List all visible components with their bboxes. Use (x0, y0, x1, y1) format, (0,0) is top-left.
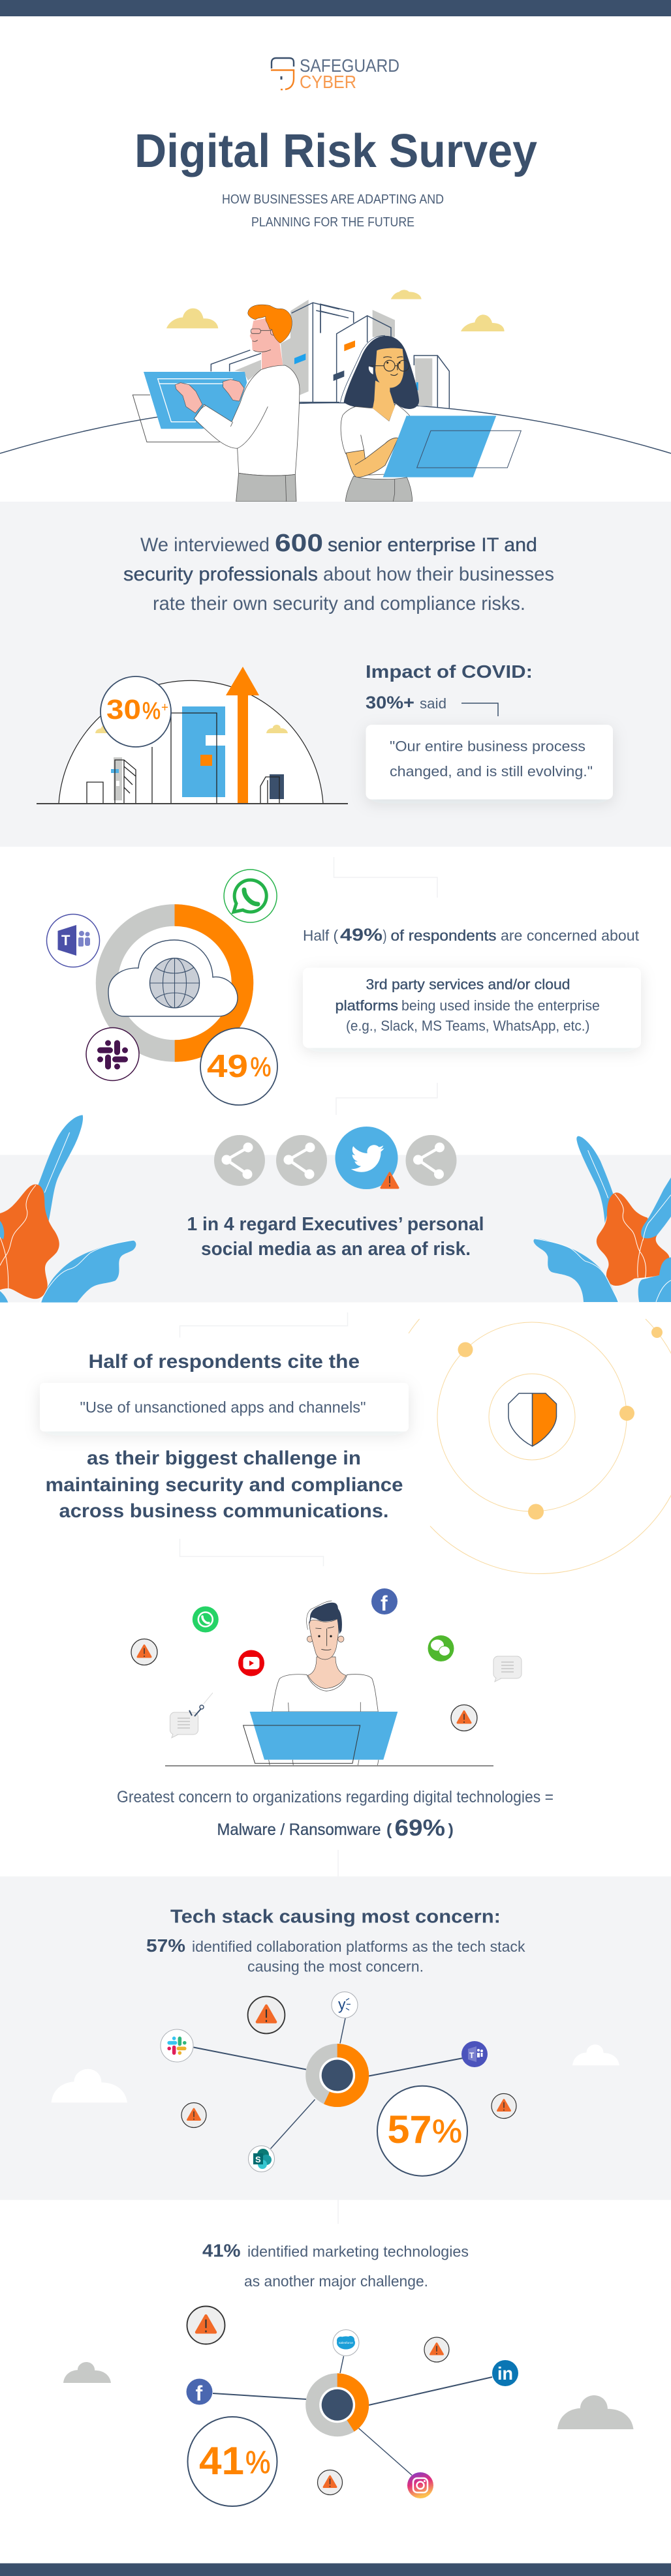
icon: SharePoint: S (255, 2155, 261, 2164)
text: 30%+ said: said (420, 695, 446, 712)
dome (59, 680, 323, 804)
buildings (87, 706, 284, 804)
icon: Instagram (407, 2472, 433, 2498)
text: biggest challenge: across business communications. (59, 1500, 389, 1522)
logo: SafeGuard Cyber: SAFEGUARD (300, 55, 399, 76)
text: 41% identified: as another major challenge. (244, 2273, 428, 2290)
intro text: 600 (275, 530, 323, 557)
icon: YouTube (238, 1650, 264, 1676)
illustration: worried man at laptop (165, 1601, 493, 1766)
heading: Impact of COVID: Impact of COVID: (366, 661, 533, 682)
icon: Yammer (332, 1992, 358, 2018)
text: 57% identified: identified collaboration platforms as the tech stack (192, 1938, 525, 1955)
icon: Yammer: y (338, 1996, 346, 2013)
icon: warning small left (181, 2103, 206, 2128)
logo: SafeGuard Cyber (271, 55, 399, 92)
icon: Facebook: f (381, 1592, 388, 1615)
scene: woman with tablet and buildings (320, 304, 521, 502)
text: malware 69%: ( (386, 1821, 392, 1839)
text: 57% identified: 57% (146, 1935, 185, 1956)
callout: unsanctioned card (40, 1383, 409, 1431)
text: biggest challenge: as their biggest challenge in (87, 1447, 361, 1469)
text: 57% identified (146, 1935, 525, 1975)
icon: Facebook (371, 1588, 398, 1615)
text: greatest concern: Greatest concern to organizations regarding digital technologies = (117, 1788, 554, 1806)
top bar (0, 0, 671, 16)
intro text: about how their businesses (323, 564, 554, 585)
stat bubble: 41% (188, 2417, 277, 2506)
ground line (37, 803, 348, 804)
panel: executives social media (0, 1115, 671, 1303)
text: 1 in 4 (187, 1214, 484, 1260)
text: half of respondents (303, 925, 639, 945)
icon: Microsoft Teams: T (61, 932, 70, 948)
icon: Facebook (187, 2378, 213, 2405)
icon: LinkedIn: in (497, 2363, 513, 2384)
clouds in dome (95, 725, 288, 733)
heading: tech stack: Tech stack causing most concern: (170, 1906, 501, 1927)
donut chart 57% (313, 2051, 362, 2100)
stat bubble: 49% (200, 1028, 277, 1105)
icon: Facebook: f (196, 2382, 202, 2405)
text: 57% identified: causing the most concern. (247, 1958, 424, 1975)
intro text: rate their own security and compliance risks. (153, 593, 525, 614)
icon: Slack colour (161, 2029, 193, 2062)
stat bubble: 57%: 57 (388, 2108, 432, 2151)
callout: third-party card (303, 968, 641, 1048)
text: half of respondents cite: Half of respondents cite the (89, 1351, 360, 1372)
stat bubble: 30%+: % (142, 697, 161, 724)
icon: chat bubble right (493, 1656, 522, 1682)
icon: Salesforce: salesforce (339, 2341, 354, 2344)
text: 41% identified (202, 2240, 469, 2290)
panel: tech stack 57% (0, 1876, 671, 2200)
text: malware 69%: ) (448, 1821, 454, 1839)
text: 30%+ said (366, 693, 446, 712)
intro text: security professionals (123, 564, 318, 585)
text: half of respondents: of respondents (390, 927, 496, 944)
icon: Teams filled (461, 2041, 488, 2067)
connectors (193, 2018, 463, 2149)
stat bubble: 41%: % (245, 2446, 270, 2480)
cloud: yellow left (166, 309, 218, 328)
panel background (0, 1155, 671, 1302)
bottom bar (0, 2564, 671, 2576)
icon: WhatsApp (224, 870, 277, 922)
text: 1 in 4: 1 in 4 regard Executives’ personal (187, 1214, 484, 1235)
clouds: white (51, 2044, 619, 2102)
panel background (0, 502, 671, 847)
stat bubble: 57%: % (432, 2113, 462, 2149)
text: 41% identified: identified marketing technologies (247, 2243, 469, 2260)
ground line (165, 1765, 493, 1766)
illustration: right plant (533, 1136, 671, 1303)
text: 41% identified: 41% (202, 2240, 241, 2261)
callout: quote card: changed, and is still evolving." (390, 763, 593, 780)
icon: Teams filled: T (469, 2051, 475, 2060)
intro text: senior enterprise IT and (328, 534, 537, 556)
text: malware 69%: Malware / Ransomware (217, 1821, 381, 1839)
icon: Twitter with warning (336, 1127, 398, 1189)
stat bubble: 49%: % (251, 1052, 272, 1082)
callout: quote card (366, 725, 613, 800)
donut chart 49% (107, 915, 243, 1051)
donut chart 41% (313, 2380, 362, 2430)
icon: warning right (451, 1705, 477, 1731)
stat bubble: 49%: 49 (207, 1049, 248, 1084)
icon: Microsoft Teams (47, 915, 99, 967)
illustration: left plant (0, 1115, 136, 1303)
icon: warning small top (424, 2337, 449, 2362)
connector (461, 703, 498, 716)
icon: LinkedIn (492, 2360, 518, 2386)
connectors (213, 2356, 492, 2475)
ground arc (0, 403, 671, 453)
icon: share circle 3 (406, 1135, 457, 1186)
icon: share circle 2 (276, 1135, 327, 1186)
clouds: yellow right (391, 290, 505, 331)
clouds: grey (63, 2362, 633, 2429)
text: 30%+ said: 30%+ (366, 693, 414, 712)
icon: warning large (187, 2307, 225, 2344)
intro text (123, 530, 554, 614)
text: malware 69%: 69% (394, 1815, 445, 1841)
subtitle: HOW BUSINESSES ARE ADAPTING AND (222, 192, 444, 207)
diagram: collaboration hub (161, 1992, 516, 2176)
icon: share circle 1 (214, 1135, 265, 1186)
panel: marketing technologies 41% (63, 2200, 633, 2506)
panel: unsanctioned apps (40, 1312, 671, 1573)
icon: WeChat (428, 1635, 454, 1661)
intro text: We interviewed (140, 534, 270, 556)
panel background (0, 1876, 671, 2200)
subtitle: PLANNING FOR THE FUTURE (251, 215, 414, 230)
panel: third-party platforms 49% (47, 857, 641, 1115)
stat bubble: 30%+ (101, 676, 171, 747)
stat bubble: 30%+: 30 (106, 694, 141, 725)
diagram: marketing hub (187, 2307, 518, 2506)
callout: third-party card: 3rd party services and/or cloud (366, 976, 570, 993)
icon: shield (508, 1393, 556, 1446)
text: 1 in 4: social media as an area of risk. (201, 1239, 471, 1260)
icon: chat bubble with phishing hook (170, 1693, 213, 1738)
icon: Slack (86, 1028, 139, 1080)
callout: unsanctioned card: "Use of unsanctioned apps and channels" (80, 1399, 366, 1417)
panel: interview and COVID impact (0, 502, 671, 847)
growth arrow (226, 667, 259, 804)
callout: third-party card: being used inside the enterprise (401, 997, 600, 1014)
text: biggest challenge (46, 1447, 403, 1522)
scene: man with tablet and buildings (133, 299, 339, 502)
text: half of respondents: 49% (340, 925, 382, 945)
icon: warning small bottom (317, 2470, 342, 2494)
icon: warning large (248, 1997, 285, 2033)
icon: SharePoint (248, 2146, 274, 2172)
text: half of respondents: are concerned about (501, 927, 639, 944)
panel: malware concern (117, 1588, 554, 1877)
callout: third-party card: (e.g., Slack, MS Teams, WhatsApp, etc.) (346, 1018, 590, 1034)
title: Digital Risk Survey (134, 125, 537, 177)
illustration: two professionals with tablets (0, 290, 671, 502)
logo: SafeGuard Cyber: CYBER (300, 72, 356, 92)
text: biggest challenge: maintaining security and compliance (46, 1474, 403, 1496)
stat bubble: 41%: 41 (199, 2439, 244, 2483)
stat bubble: 57% (377, 2086, 467, 2176)
subtitle (222, 192, 444, 230)
icon: cloud with globe (108, 940, 238, 1016)
callout: quote card: "Our entire business process (390, 738, 585, 754)
illustration: orbit rings with shield (409, 1319, 671, 1573)
text: half of respondents: Half ( (303, 927, 338, 944)
icon: warning small right (492, 2094, 516, 2119)
illustration: dome with growth arrow (37, 667, 348, 804)
icon: warning left (131, 1639, 157, 1665)
icon: Salesforce (333, 2330, 359, 2356)
text: half of respondents: ) (382, 927, 386, 944)
callout: third-party card: platforms (336, 997, 398, 1014)
text: malware 69% (217, 1815, 454, 1841)
icon: WhatsApp (193, 1606, 219, 1632)
panel: hero header (0, 0, 671, 502)
stat bubble: 30%+: + (161, 701, 168, 715)
